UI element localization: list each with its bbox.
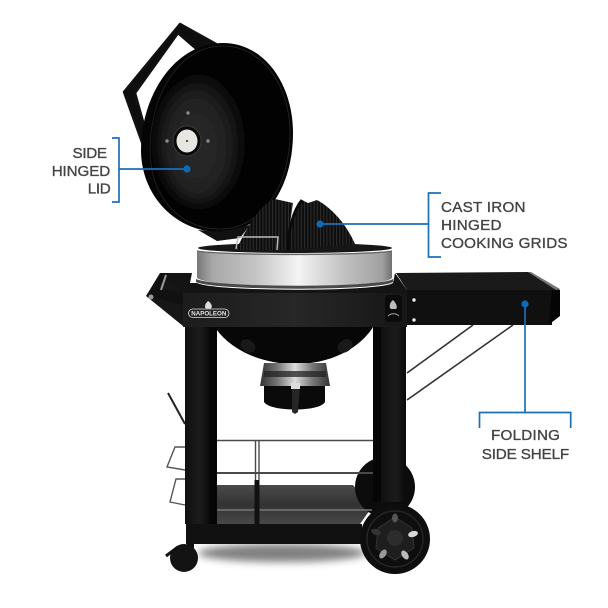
kettle bowl silver band	[196, 237, 393, 289]
main wheel	[360, 504, 430, 574]
callout: cast iron hinged cooking grids: COOKING GRIDS	[441, 235, 568, 252]
cooking grids	[236, 199, 355, 250]
lid inner dome	[158, 76, 242, 204]
bowl vents	[238, 336, 355, 356]
callout: cast iron hinged cooking grids	[316, 193, 568, 257]
cart legs and crossbar	[185, 326, 406, 544]
folding side shelf	[396, 272, 560, 325]
vent dots	[165, 111, 210, 143]
side basket and rod	[167, 393, 185, 505]
callout: folding side shelf: FOLDING	[491, 427, 560, 444]
open lid	[141, 43, 293, 241]
lid vent	[173, 126, 201, 156]
callout: cast iron hinged cooking grids: CAST IRON	[441, 199, 526, 216]
lid lower hinge	[198, 225, 250, 241]
kettle bowl underside	[215, 327, 373, 364]
kettle rim opening	[198, 243, 392, 253]
NAPOLEON logo: NAPOLEON	[191, 311, 227, 318]
back wheel	[355, 457, 415, 517]
callout: side hinged lid: HINGED	[52, 163, 110, 180]
NAPOLEON logo	[188, 301, 229, 318]
callout: folding side shelf	[480, 300, 571, 463]
folding shelf support rods	[407, 325, 513, 400]
lid handle	[124, 24, 216, 145]
caster wheel	[166, 540, 198, 572]
callout: cast iron hinged cooking grids: HINGED	[441, 217, 502, 234]
ignition control	[385, 295, 402, 322]
ash catcher	[260, 363, 330, 414]
lower shelf	[215, 485, 372, 524]
callout: side hinged lid	[52, 138, 191, 202]
callout: folding side shelf: SIDE SHELF	[482, 446, 569, 463]
grill cart table	[146, 273, 407, 327]
wire rack	[210, 440, 381, 524]
callout: side hinged lid: SIDE	[72, 145, 107, 162]
callout: side hinged lid: LID	[88, 180, 111, 198]
floor shadow	[198, 544, 366, 562]
